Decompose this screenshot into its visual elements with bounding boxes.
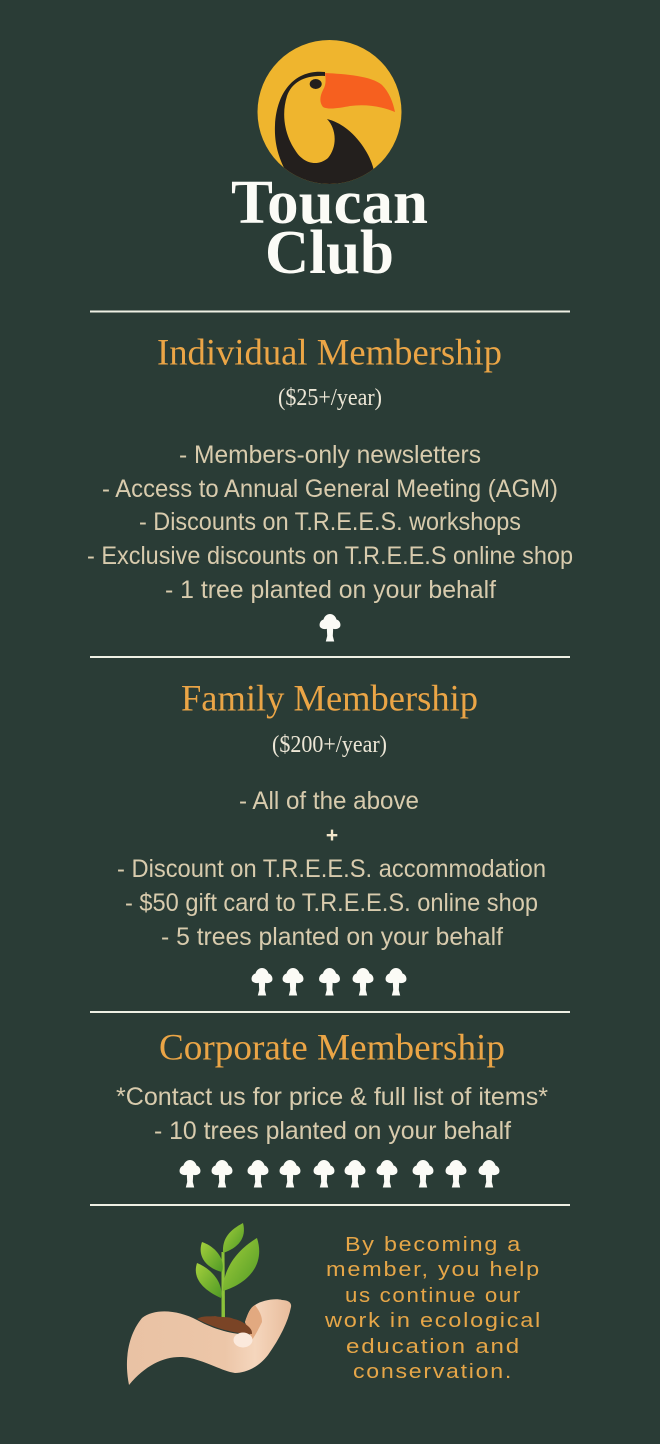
benefits list: family: - All of the above	[239, 787, 419, 815]
benefits list: family: - Discount on T.R.E.E.S. accommodation	[117, 855, 546, 883]
benefits list: family: - $50 gift card to T.R.E.E.S. online shop	[125, 889, 538, 917]
icon: hand holding seedling	[127, 1223, 291, 1385]
icon row: ten trees	[180, 1160, 499, 1188]
price: family: ($200+/year)	[272, 732, 387, 758]
heading: individual membership: Individual Membership	[157, 332, 502, 374]
benefits list: family	[117, 787, 546, 951]
benefits list: individual: - Discounts on T.R.E.E.S. workshops	[139, 508, 521, 536]
price: individual: ($25+/year)	[278, 385, 382, 411]
icon row: five trees	[252, 968, 406, 996]
benefits list: individual: - Members-only newsletters	[179, 441, 481, 469]
logo: Toucan Club	[231, 40, 428, 287]
callout: closing message: work in ecological	[324, 1310, 542, 1332]
logo wordmark: Toucan	[231, 169, 428, 237]
callout: closing message: conservation.	[353, 1361, 513, 1383]
benefits list: individual	[87, 441, 573, 604]
logo icon: toucan in yellow circle	[258, 40, 402, 200]
icon: one tree	[320, 614, 340, 642]
heading: corporate membership: Corporate Membership	[159, 1028, 505, 1068]
callout: closing message	[324, 1234, 542, 1383]
panel: individual membership	[87, 332, 573, 642]
panel: family membership	[117, 678, 546, 996]
callout: closing message: By becoming a	[345, 1234, 522, 1256]
callout: closing message: us continue our	[345, 1285, 522, 1307]
heading: family membership: Family Membership	[181, 678, 478, 720]
benefits list: individual: - 1 tree planted on your behalf	[165, 576, 496, 604]
logo wordmark	[231, 169, 428, 287]
benefits list: corporate: - 10 trees planted on your behalf	[154, 1117, 511, 1145]
callout: closing message: member, you help	[326, 1259, 541, 1281]
benefits list: family: +	[326, 824, 338, 847]
benefits list: corporate: *Contact us for price & full list of items*	[116, 1083, 548, 1111]
logo wordmark: Club	[265, 219, 394, 287]
infographic page	[88, 40, 572, 1385]
benefits list: corporate	[116, 1083, 548, 1145]
panel: corporate membership	[116, 1028, 548, 1188]
benefits list: family: - 5 trees planted on your behalf	[161, 923, 503, 951]
benefits list: individual: - Exclusive discounts on T.R.E.E.S online shop	[87, 542, 573, 570]
benefits list: individual: - Access to Annual General Meeting (AGM)	[102, 475, 558, 503]
callout: closing message: education and	[346, 1336, 521, 1358]
